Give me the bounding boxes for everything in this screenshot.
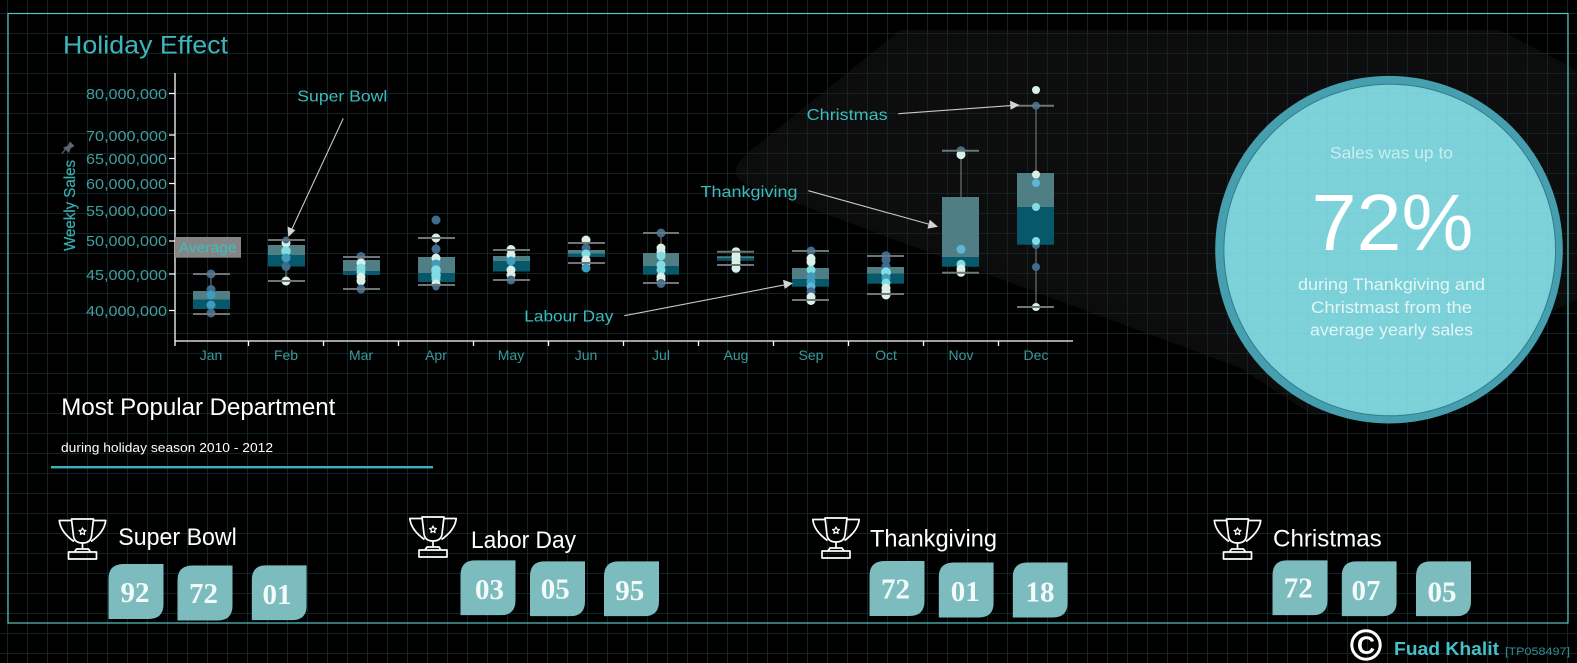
annotation: Christmas	[807, 101, 1020, 124]
annotation: Super Bowl: Super Bowl	[297, 88, 387, 106]
text: description: Christmast from the	[1311, 299, 1472, 317]
title: Holiday Effect: Holiday Effect	[63, 32, 228, 60]
x axis: Jan	[200, 347, 222, 363]
department group: Super Bowl	[59, 519, 307, 620]
annotation: Thankgiving	[700, 184, 938, 229]
box: Feb	[268, 236, 305, 286]
x axis: Feb	[274, 347, 298, 363]
box: Oct	[867, 251, 904, 300]
annotation: Thankgiving: Thankgiving	[700, 184, 798, 201]
label: Labor Day: Labor Day	[471, 527, 576, 554]
annotation: Christmas: Christmas	[807, 107, 888, 124]
text: Sales was up to: Sales was up to	[1330, 143, 1453, 162]
box: Jul	[643, 228, 679, 288]
icon: pin	[62, 142, 74, 154]
card: 92	[108, 564, 164, 619]
card: 72: 72	[189, 578, 218, 610]
x axis: Dec	[1024, 347, 1048, 363]
department group: Labor Day	[410, 517, 659, 616]
text: description: during Thankgiving and	[1298, 276, 1485, 294]
card: 07	[1342, 561, 1397, 616]
subheading: holiday season: during holiday season 2010 - 2012	[61, 440, 273, 455]
card: 18: 18	[1026, 577, 1054, 609]
box: Jun	[568, 236, 605, 272]
y axis: 50,000,000	[86, 233, 167, 250]
x axis	[175, 341, 1073, 363]
annotation: Labour Day: Labour Day	[524, 309, 613, 326]
icon: trophy	[1214, 519, 1261, 559]
x axis: Oct	[875, 347, 897, 363]
box: Sep	[792, 246, 829, 305]
x axis: Nov	[949, 347, 973, 363]
x axis: Apr	[425, 347, 447, 363]
callout: 72% sales circle	[1215, 76, 1563, 424]
chart: weekly sales box plot by month	[62, 73, 1073, 363]
card: 95	[604, 561, 659, 616]
x axis: May	[498, 347, 524, 363]
icon: trophy	[59, 519, 106, 559]
stat: 72%: 72%	[1312, 178, 1474, 267]
icon: trophy	[410, 517, 456, 557]
annotation: Super Bowl	[288, 88, 387, 237]
card: 72: 72	[881, 573, 910, 605]
name: Fuad Khalit: Fuad Khalit	[1394, 639, 1499, 659]
label: Thankgiving: Thankgiving	[870, 526, 997, 553]
footer: author credit	[1352, 631, 1570, 660]
card: 03	[460, 560, 516, 615]
card: 01: 01	[262, 579, 292, 611]
y axis	[86, 73, 175, 341]
x axis: Mar	[349, 347, 373, 363]
card: 72: 72	[1284, 572, 1313, 604]
icon: trophy	[813, 518, 859, 558]
box: Jan	[193, 270, 230, 318]
annotation: Labour Day	[524, 280, 793, 326]
card: 07: 07	[1352, 575, 1380, 607]
box: Mar	[343, 252, 380, 294]
label: Super Bowl: Super Bowl	[118, 524, 237, 551]
x axis: Sep	[799, 347, 824, 363]
y axis: 60,000,000	[86, 176, 167, 193]
card: 05	[530, 561, 585, 616]
card: 05: 05	[541, 573, 570, 605]
x axis: Jun	[575, 347, 597, 363]
y axis: 70,000,000	[86, 128, 167, 145]
y axis: 45,000,000	[86, 267, 167, 284]
text: description	[1298, 276, 1485, 340]
card: 01	[939, 562, 994, 618]
box: Nov	[942, 146, 979, 277]
card: 72	[870, 561, 924, 616]
department group: Christmas	[1214, 519, 1471, 616]
box: May	[493, 245, 530, 284]
card: 03: 03	[475, 574, 504, 606]
card: 72	[1272, 560, 1328, 615]
tag: Average	[175, 237, 241, 258]
card: 05	[1416, 561, 1471, 616]
department group: Thankgiving	[813, 518, 1068, 618]
y axis: 40,000,000	[86, 303, 167, 320]
icon: copyright	[1352, 631, 1380, 660]
id: TP058497: [TP058497]	[1505, 646, 1570, 658]
card: 18	[1013, 562, 1068, 618]
card: 72	[178, 566, 232, 620]
box: Apr	[418, 216, 455, 290]
card: 95: 95	[615, 575, 644, 607]
box: Dec	[1017, 86, 1054, 311]
text: description: average yearly sales	[1310, 322, 1473, 340]
label: Christmas: Christmas	[1273, 526, 1382, 553]
box: Aug	[717, 247, 754, 273]
icon: copyright: C	[1357, 632, 1375, 660]
heading: Most Popular Department: Most Popular Department	[61, 394, 336, 421]
divider underline	[51, 466, 433, 468]
y axis: 80,000,000	[86, 86, 167, 103]
tag: Average: Average	[179, 240, 237, 257]
x axis: Aug	[724, 347, 748, 363]
card: 01	[252, 565, 307, 620]
y axis: 55,000,000	[86, 203, 167, 220]
card: 05: 05	[1428, 577, 1456, 609]
card: 01: 01	[951, 576, 980, 608]
y axis title: Weekly Sales: Weekly Sales	[62, 160, 79, 251]
y axis: 65,000,000	[86, 151, 167, 168]
x axis: Jul	[652, 347, 670, 363]
card: 92: 92	[120, 577, 150, 609]
